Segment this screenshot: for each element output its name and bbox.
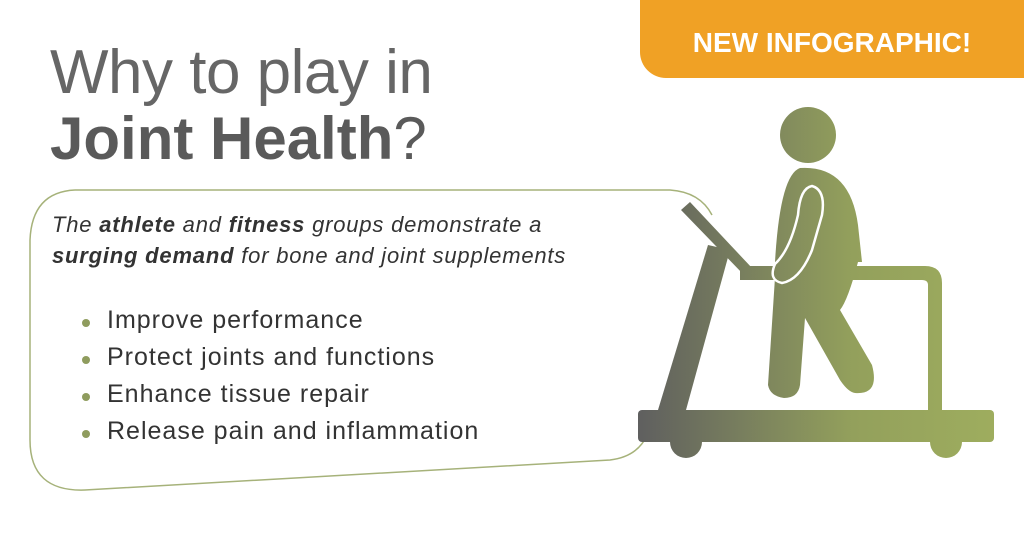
bullet list: Protect joints and functions [107, 343, 435, 371]
title: Why to play in [50, 38, 432, 107]
bullet list: Release pain and inflammation [107, 417, 479, 445]
title bold line: Joint Health? [50, 105, 427, 172]
bullet list: Improve performance [107, 306, 364, 334]
badge: NEW INFOGRAPHIC! [693, 27, 971, 58]
badge [640, 0, 1024, 78]
intro text [52, 212, 566, 268]
intro text: The athlete and fitness groups demonstrate a [52, 212, 542, 237]
intro text: surging demand for bone and joint supplements [52, 243, 566, 268]
bullet list [82, 306, 479, 445]
bullet list: Enhance tissue repair [107, 380, 370, 408]
